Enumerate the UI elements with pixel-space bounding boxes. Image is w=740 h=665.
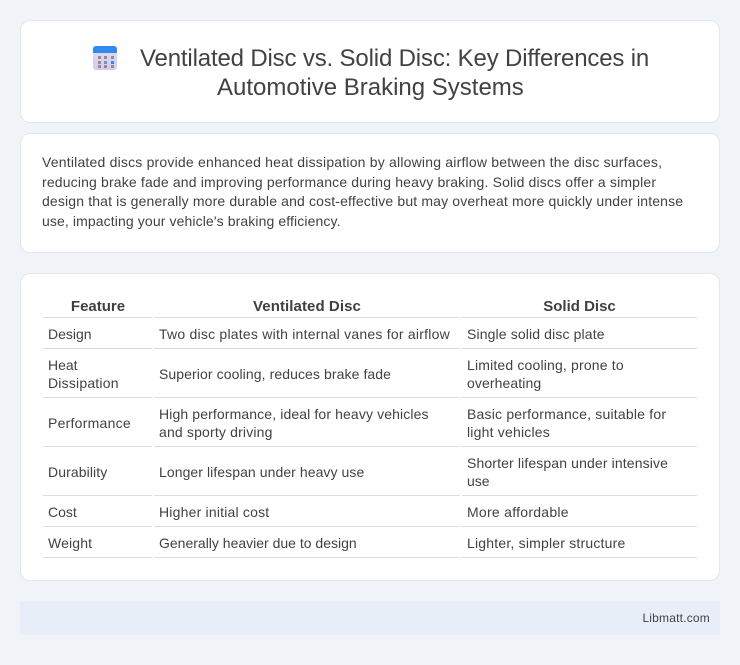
row: heat dissipation: Superior cooling, reduces brake fade: [159, 366, 391, 382]
row: heat dissipation: Limited cooling, prone to: [467, 357, 624, 373]
row: performance: and sporty driving: [159, 424, 273, 440]
row: durability: Durability: [48, 464, 107, 480]
row: heat dissipation: [48, 357, 624, 391]
table header: Ventilated Disc: [253, 298, 361, 315]
row: durability: use: [467, 473, 490, 489]
row: performance: Basic performance, suitable for: [467, 406, 666, 422]
row: heat dissipation: overheating: [467, 375, 541, 391]
table header: Feature: [71, 298, 125, 315]
row: performance: light vehicles: [467, 424, 550, 440]
row: heat dissipation: Dissipation: [48, 375, 119, 391]
description text: use, impacting your vehicle's braking efficiency.: [42, 213, 341, 229]
title: [140, 45, 649, 101]
row: performance: Performance: [48, 415, 131, 431]
description text: [42, 154, 683, 229]
table header: [71, 298, 616, 315]
icon: calendar: [93, 46, 117, 70]
row: design: Two disc plates with internal vanes for airflow: [159, 326, 450, 342]
row: cost: [48, 504, 569, 520]
row: weight: [48, 535, 625, 551]
panel: title card: [20, 20, 720, 123]
row: performance: [48, 406, 666, 440]
row: design: [48, 326, 605, 342]
description text: reducing brake fade and improving performance during heavy braking. Solid discs offer a simpler: [42, 174, 656, 190]
panel: comparison table: [20, 273, 720, 581]
row: durability: [48, 455, 668, 489]
row: cost: Cost: [48, 504, 77, 520]
table header: Solid Disc: [543, 298, 616, 315]
title: Automotive Braking Systems: [217, 74, 524, 101]
row: weight: Lighter, simpler structure: [467, 535, 625, 551]
row: weight: Weight: [48, 535, 92, 551]
row: performance: High performance, ideal for heavy vehicles: [159, 406, 429, 422]
description text: design that is generally more durable and cost-effective but may overheat more quickly under intense: [42, 193, 683, 209]
row: durability: Shorter lifespan under intensive: [467, 455, 668, 471]
description text: Ventilated discs provide enhanced heat dissipation by allowing airflow between the disc surfaces,: [42, 154, 662, 170]
row: design: Single solid disc plate: [467, 326, 605, 342]
title: Ventilated Disc vs. Solid Disc: Key Differences in: [140, 45, 649, 72]
row: cost: More affordable: [467, 504, 569, 520]
row: weight: Generally heavier due to design: [159, 535, 357, 551]
row: cost: Higher initial cost: [159, 504, 269, 520]
footer credit: Libmatt.com: [642, 611, 710, 625]
row: heat dissipation: Heat: [48, 357, 78, 373]
footer: [20, 601, 720, 635]
row: durability: Longer lifespan under heavy use: [159, 464, 364, 480]
panel: description: [20, 133, 720, 253]
row: design: Design: [48, 326, 92, 342]
